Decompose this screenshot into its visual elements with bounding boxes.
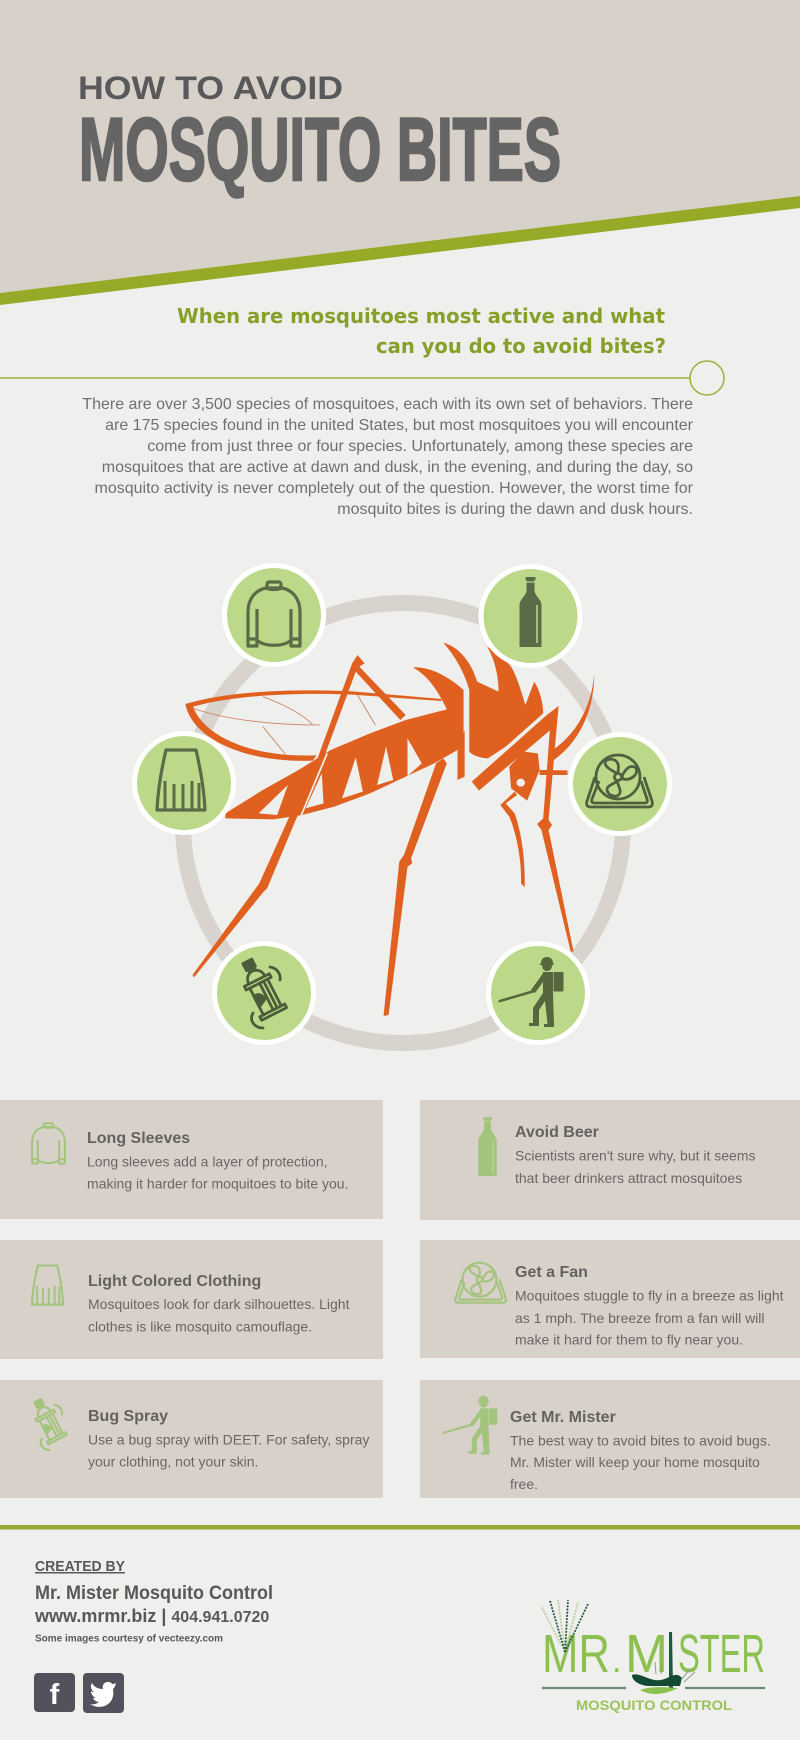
card icon: bottle (478, 1117, 497, 1176)
intro paragraph: There are over 3,500 species of mosquitoes, each with its own set of behaviors. There (82, 396, 693, 413)
wing (185, 690, 441, 761)
card: Long Sleeves (0, 1100, 383, 1219)
card: Avoid Beer: that beer drinkers attract mosquitoes (515, 1170, 742, 1186)
intro paragraph: come from just three or four species. Unfortunately, among these species are (147, 438, 693, 455)
subheading (177, 304, 666, 358)
head (509, 752, 540, 801)
card: Avoid Beer (420, 1100, 800, 1220)
logo tagline: MOSQUITO CONTROL (576, 1697, 732, 1713)
icon circle: spray can (214, 944, 314, 1042)
card: Light Colored Clothing: Mosquitoes look for dark silhouettes. Light (88, 1296, 350, 1312)
card: Get a Fan: Get a Fan (515, 1264, 588, 1281)
back spike (413, 667, 464, 709)
card: Light Colored Clothing (0, 1240, 383, 1359)
card icon: fan (455, 1263, 506, 1303)
proboscis (500, 792, 525, 887)
card: Get a Fan: Moquitoes stuggle to fly in a breeze as light (515, 1288, 784, 1304)
card: Bug Spray: Bug Spray (88, 1408, 168, 1425)
footer rule (0, 1525, 800, 1530)
intro paragraph: mosquitoes that are active at dawn and dusk, in the evening, and during the day, so (102, 459, 693, 476)
social: twitter (83, 1673, 124, 1713)
logo: Mr. Mister Mosquito Control (541, 1600, 765, 1713)
card: Get a Fan (420, 1240, 800, 1358)
logo wordmark (542, 1624, 765, 1684)
title: HOW TO AVOID (78, 70, 343, 106)
ring behind mosquito (183, 603, 623, 1043)
hind leg (192, 655, 406, 977)
mosquito illustration (185, 643, 594, 1016)
logo wordmark: MR (542, 1624, 610, 1684)
icon circle: fan (570, 734, 670, 834)
intro paragraph (82, 396, 694, 518)
credits: CREATED BY (35, 1558, 125, 1575)
intro paragraph: mosquito activity is never completely out of the question. However, the worst time for (94, 480, 694, 497)
card: Get a Fan: as 1 mph. The breeze from a fan will will (515, 1310, 765, 1326)
front body band (472, 706, 559, 791)
card: Light Colored Clothing: clothes is like mosquito camouflage. (88, 1318, 312, 1334)
abdomen (225, 707, 464, 819)
card: Get Mr. Mister: The best way to avoid bites to avoid bugs. (510, 1432, 771, 1448)
front leg (537, 706, 574, 952)
divider with circle (0, 361, 724, 395)
card: Get a Fan: make it hard for them to fly near you. (515, 1332, 743, 1348)
card: Avoid Beer: Avoid Beer (515, 1124, 599, 1141)
thorax spikes (443, 643, 543, 758)
card: Get Mr. Mister: Mr. Mister will keep your home mosquito (510, 1454, 760, 1470)
card: Bug Spray: Use a bug spray with DEET. For safety, spray (88, 1432, 369, 1448)
social: facebook: f (50, 1679, 60, 1711)
neck piece (457, 730, 465, 780)
logo wordmark: . (612, 1642, 621, 1680)
subheading: can you do to avoid bites? (376, 334, 666, 358)
middle leg (384, 758, 447, 1016)
header background (0, 0, 800, 293)
logo mosquito (632, 1632, 695, 1694)
subheading: When are mosquitoes most active and what (177, 304, 665, 328)
card: Bug Spray (0, 1380, 383, 1498)
icon circle: sweater (224, 566, 324, 664)
logo spray fan (541, 1600, 588, 1652)
card: Long Sleeves: Long Sleeves (87, 1130, 190, 1147)
credits: Some images courtesy of vecteezy.com (35, 1634, 223, 1644)
logo rule (542, 1687, 765, 1689)
card: Long Sleeves: making it harder for moquitoes to bite you. (87, 1176, 348, 1192)
card icon: spray (28, 1396, 67, 1450)
icon circle: sprayer man (488, 944, 588, 1042)
card: Long Sleeves: Long sleeves add a layer of protection, (87, 1154, 328, 1170)
card: Get Mr. Mister: Get Mr. Mister (510, 1409, 616, 1426)
credits (34, 1558, 273, 1644)
title (78, 70, 561, 199)
icon circle: beer bottle (481, 566, 580, 666)
card: Get Mr. Mister (420, 1380, 800, 1498)
card: Avoid Beer: Scientists aren't sure why, but it seems (515, 1148, 756, 1164)
credits: Mr. Mister Mosquito Control (35, 1583, 273, 1604)
logo wordmark: M (625, 1624, 668, 1684)
antenna (540, 673, 594, 775)
card icon: sprayer man (442, 1396, 497, 1455)
hind leg gap (299, 753, 327, 822)
icon circle: skirt (134, 734, 234, 832)
social: facebook (34, 1673, 75, 1712)
card icon: sweater (32, 1123, 65, 1164)
card: Bug Spray: your clothing, not your skin. (88, 1454, 258, 1470)
credits: www.mrmr.biz | 404.941.0720 (34, 1606, 269, 1626)
green diagonal band (0, 196, 800, 305)
intro paragraph: are 175 species found in the united States, but most mosquitoes you will encounter (105, 417, 694, 434)
card: Light Colored Clothing: Light Colored Clothing (88, 1273, 261, 1290)
card: Get Mr. Mister: free. (510, 1476, 538, 1492)
card icon: skirt (32, 1266, 63, 1305)
intro paragraph: mosquito bites is during the dawn and dusk hours. (337, 501, 693, 518)
